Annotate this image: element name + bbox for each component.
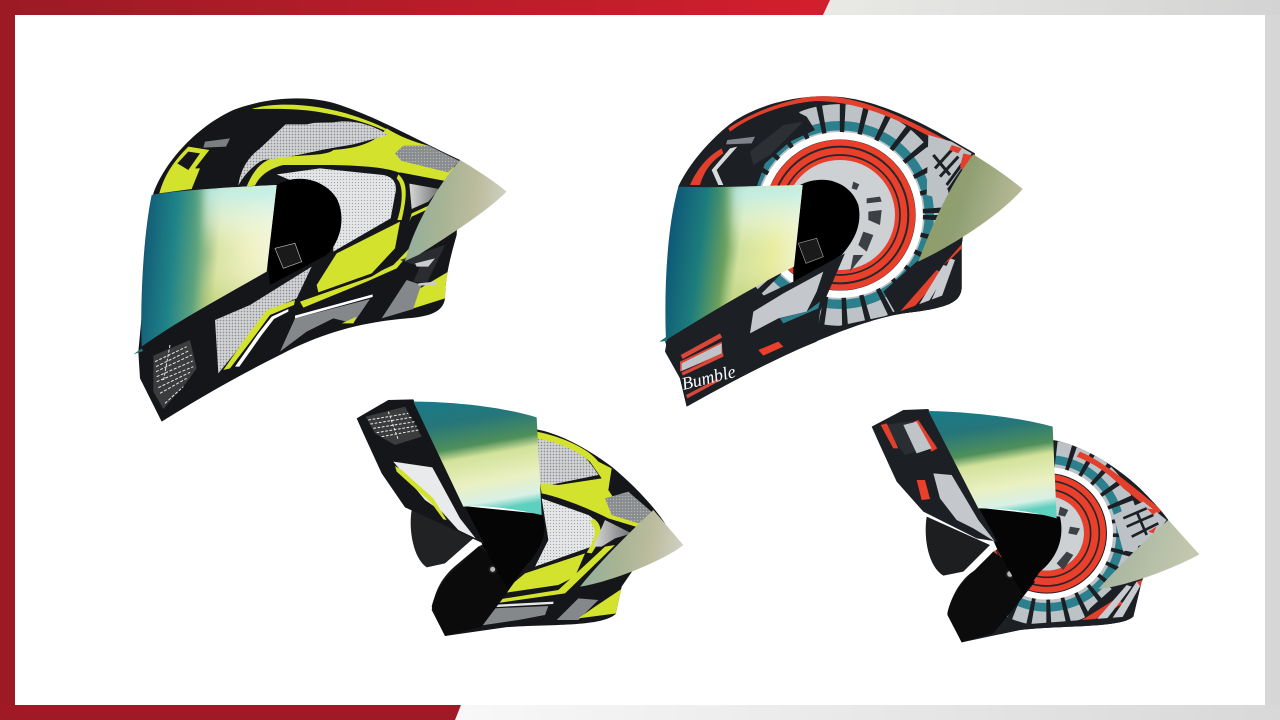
visor bbox=[659, 183, 808, 342]
inner sun visor bbox=[411, 510, 473, 567]
helmet interior bbox=[463, 506, 545, 590]
chin lower bbox=[947, 552, 1035, 642]
lower back panel bbox=[883, 238, 963, 315]
spoiler bbox=[918, 154, 1023, 262]
label tag bbox=[275, 243, 302, 268]
signature: Bumble bbox=[679, 361, 738, 394]
shell bbox=[665, 96, 975, 407]
opening bbox=[267, 179, 341, 285]
ring graphics bbox=[677, 96, 977, 352]
dark cheek panel bbox=[677, 102, 815, 188]
spoiler bbox=[405, 160, 507, 261]
pivot screw bbox=[489, 566, 496, 573]
label tag bbox=[798, 238, 823, 263]
ring graphics bbox=[968, 452, 1167, 638]
helmet: yellow open bbox=[357, 399, 683, 636]
visor raised bbox=[928, 411, 1057, 518]
inner sun visor bbox=[926, 517, 990, 576]
helmet: yellow closed bbox=[133, 98, 507, 422]
shell bbox=[138, 98, 460, 422]
helmet: red closed bbox=[659, 96, 1023, 407]
chin lower bbox=[432, 547, 518, 636]
shell bbox=[947, 440, 1168, 642]
graffiti patch bbox=[153, 340, 197, 409]
opening bbox=[793, 180, 859, 285]
shell bbox=[432, 429, 665, 636]
chin guard bbox=[665, 253, 845, 407]
helmet: red open bbox=[872, 409, 1199, 642]
helmet interior bbox=[978, 508, 1061, 595]
graphics bbox=[473, 432, 653, 627]
pivot screw bbox=[1006, 570, 1014, 578]
graphics yellow bbox=[159, 105, 459, 373]
spoiler bbox=[580, 510, 683, 587]
visor raised bbox=[413, 402, 542, 515]
spoiler bbox=[1098, 520, 1199, 589]
visor bbox=[133, 183, 283, 354]
flipped chin guard bbox=[357, 399, 484, 544]
flipped chin guard bbox=[872, 409, 997, 542]
